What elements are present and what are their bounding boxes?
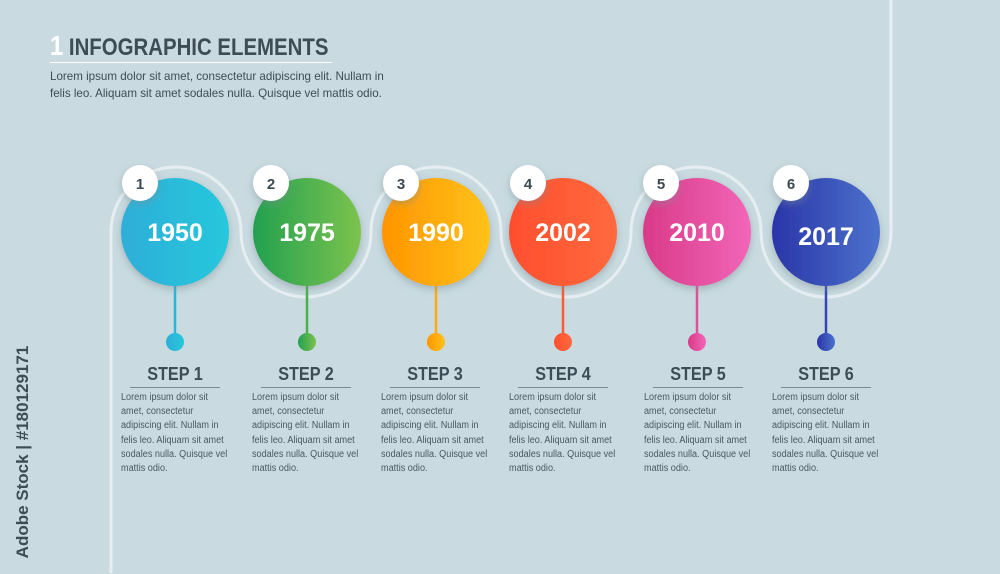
subtitle text: Lorem ipsum dolor sit amet, consectetur adipiscing elit. Nullam in	[50, 70, 384, 83]
subtitle text	[50, 70, 384, 100]
step 4 marker: 2002	[535, 219, 591, 247]
step 1 heading: STEP 1	[147, 364, 203, 384]
step 1 text	[121, 392, 227, 474]
step 4 marker	[509, 165, 617, 351]
step 1 marker: 1	[136, 176, 144, 193]
step 5 marker	[643, 165, 751, 351]
step 4 text: Lorem ipsum dolor sit	[509, 392, 596, 403]
step 5 text: adipiscing elit. Nullam in	[644, 420, 742, 431]
step 4 text	[509, 392, 615, 474]
step 1 marker: 1950	[147, 219, 203, 247]
step 6 text: Lorem ipsum dolor sit	[772, 392, 859, 403]
step 1 heading	[130, 364, 220, 388]
step 2 text: adipiscing elit. Nullam in	[252, 420, 350, 431]
step 3 text: adipiscing elit. Nullam in	[381, 420, 479, 431]
step 3 marker	[382, 165, 490, 351]
step 6 text: sodales nulla. Quisque vel	[772, 449, 878, 460]
step 2 text	[252, 392, 358, 474]
subtitle text: felis leo. Aliquam sit amet sodales nulla. Quisque vel mattis odio.	[50, 87, 382, 100]
step 2 text: amet, consectetur	[252, 406, 324, 417]
step 4 text: mattis odio.	[509, 463, 556, 474]
step 3 marker: 3	[397, 176, 405, 193]
step 3 heading	[390, 364, 480, 388]
vertical stock label: Adobe Stock | #180129171	[13, 346, 32, 558]
step 2 text: Lorem ipsum dolor sit	[252, 392, 339, 403]
step 1 text: felis leo. Aliquam sit amet	[121, 435, 224, 446]
step 2 text: sodales nulla. Quisque vel	[252, 449, 358, 460]
step 2 marker: 1975	[279, 219, 335, 247]
step 2 heading	[261, 364, 351, 388]
step 6 text	[772, 392, 878, 474]
step 1 text: adipiscing elit. Nullam in	[121, 420, 219, 431]
step 2 text: felis leo. Aliquam sit amet	[252, 435, 355, 446]
step 6 text: adipiscing elit. Nullam in	[772, 420, 870, 431]
step 3 text: sodales nulla. Quisque vel	[381, 449, 487, 460]
step 6 text: amet, consectetur	[772, 406, 844, 417]
step 5 text: amet, consectetur	[644, 406, 716, 417]
step 3 text: amet, consectetur	[381, 406, 453, 417]
step 5 heading: STEP 5	[670, 364, 726, 384]
step 3 text: Lorem ipsum dolor sit	[381, 392, 468, 403]
step 2 marker	[253, 165, 361, 351]
step 2 marker: 2	[267, 176, 275, 193]
step 6 marker: 6	[787, 176, 795, 193]
step 4 text: amet, consectetur	[509, 406, 581, 417]
step 5 text: felis leo. Aliquam sit amet	[644, 435, 747, 446]
step 5 text: sodales nulla. Quisque vel	[644, 449, 750, 460]
step 5 heading	[653, 364, 743, 388]
step 2 heading: STEP 2	[278, 364, 334, 384]
step 3 marker: 1990	[408, 219, 464, 247]
title: 1 INFOGRAPHIC ELEMENTS	[50, 30, 328, 61]
step 3 text: felis leo. Aliquam sit amet	[381, 435, 484, 446]
step 6 heading	[781, 364, 871, 388]
step 4 marker: 4	[524, 176, 533, 193]
step 4 heading: STEP 4	[535, 364, 591, 384]
step 3 heading: STEP 3	[407, 364, 463, 384]
wavy path	[111, 0, 891, 573]
step 1 text: mattis odio.	[121, 463, 168, 474]
step 1 text: sodales nulla. Quisque vel	[121, 449, 227, 460]
step 6 text: felis leo. Aliquam sit amet	[772, 435, 875, 446]
step 6 heading: STEP 6	[798, 364, 854, 384]
step 5 text	[644, 392, 750, 474]
step 1 text: amet, consectetur	[121, 406, 193, 417]
step 5 text: Lorem ipsum dolor sit	[644, 392, 731, 403]
step 5 marker: 2010	[669, 219, 725, 247]
step 6 text: mattis odio.	[772, 463, 819, 474]
step 1 marker	[121, 165, 229, 351]
step 6 marker	[772, 165, 880, 351]
step 4 text: sodales nulla. Quisque vel	[509, 449, 615, 460]
step 1 text: Lorem ipsum dolor sit	[121, 392, 208, 403]
step 6 marker: 2017	[798, 223, 854, 251]
step 5 text: mattis odio.	[644, 463, 691, 474]
step 2 text: mattis odio.	[252, 463, 299, 474]
step 4 text: adipiscing elit. Nullam in	[509, 420, 607, 431]
step 5 marker: 5	[657, 176, 665, 193]
step 4 text: felis leo. Aliquam sit amet	[509, 435, 612, 446]
step 4 heading	[518, 364, 608, 388]
step 3 text	[381, 392, 487, 474]
step 3 text: mattis odio.	[381, 463, 428, 474]
